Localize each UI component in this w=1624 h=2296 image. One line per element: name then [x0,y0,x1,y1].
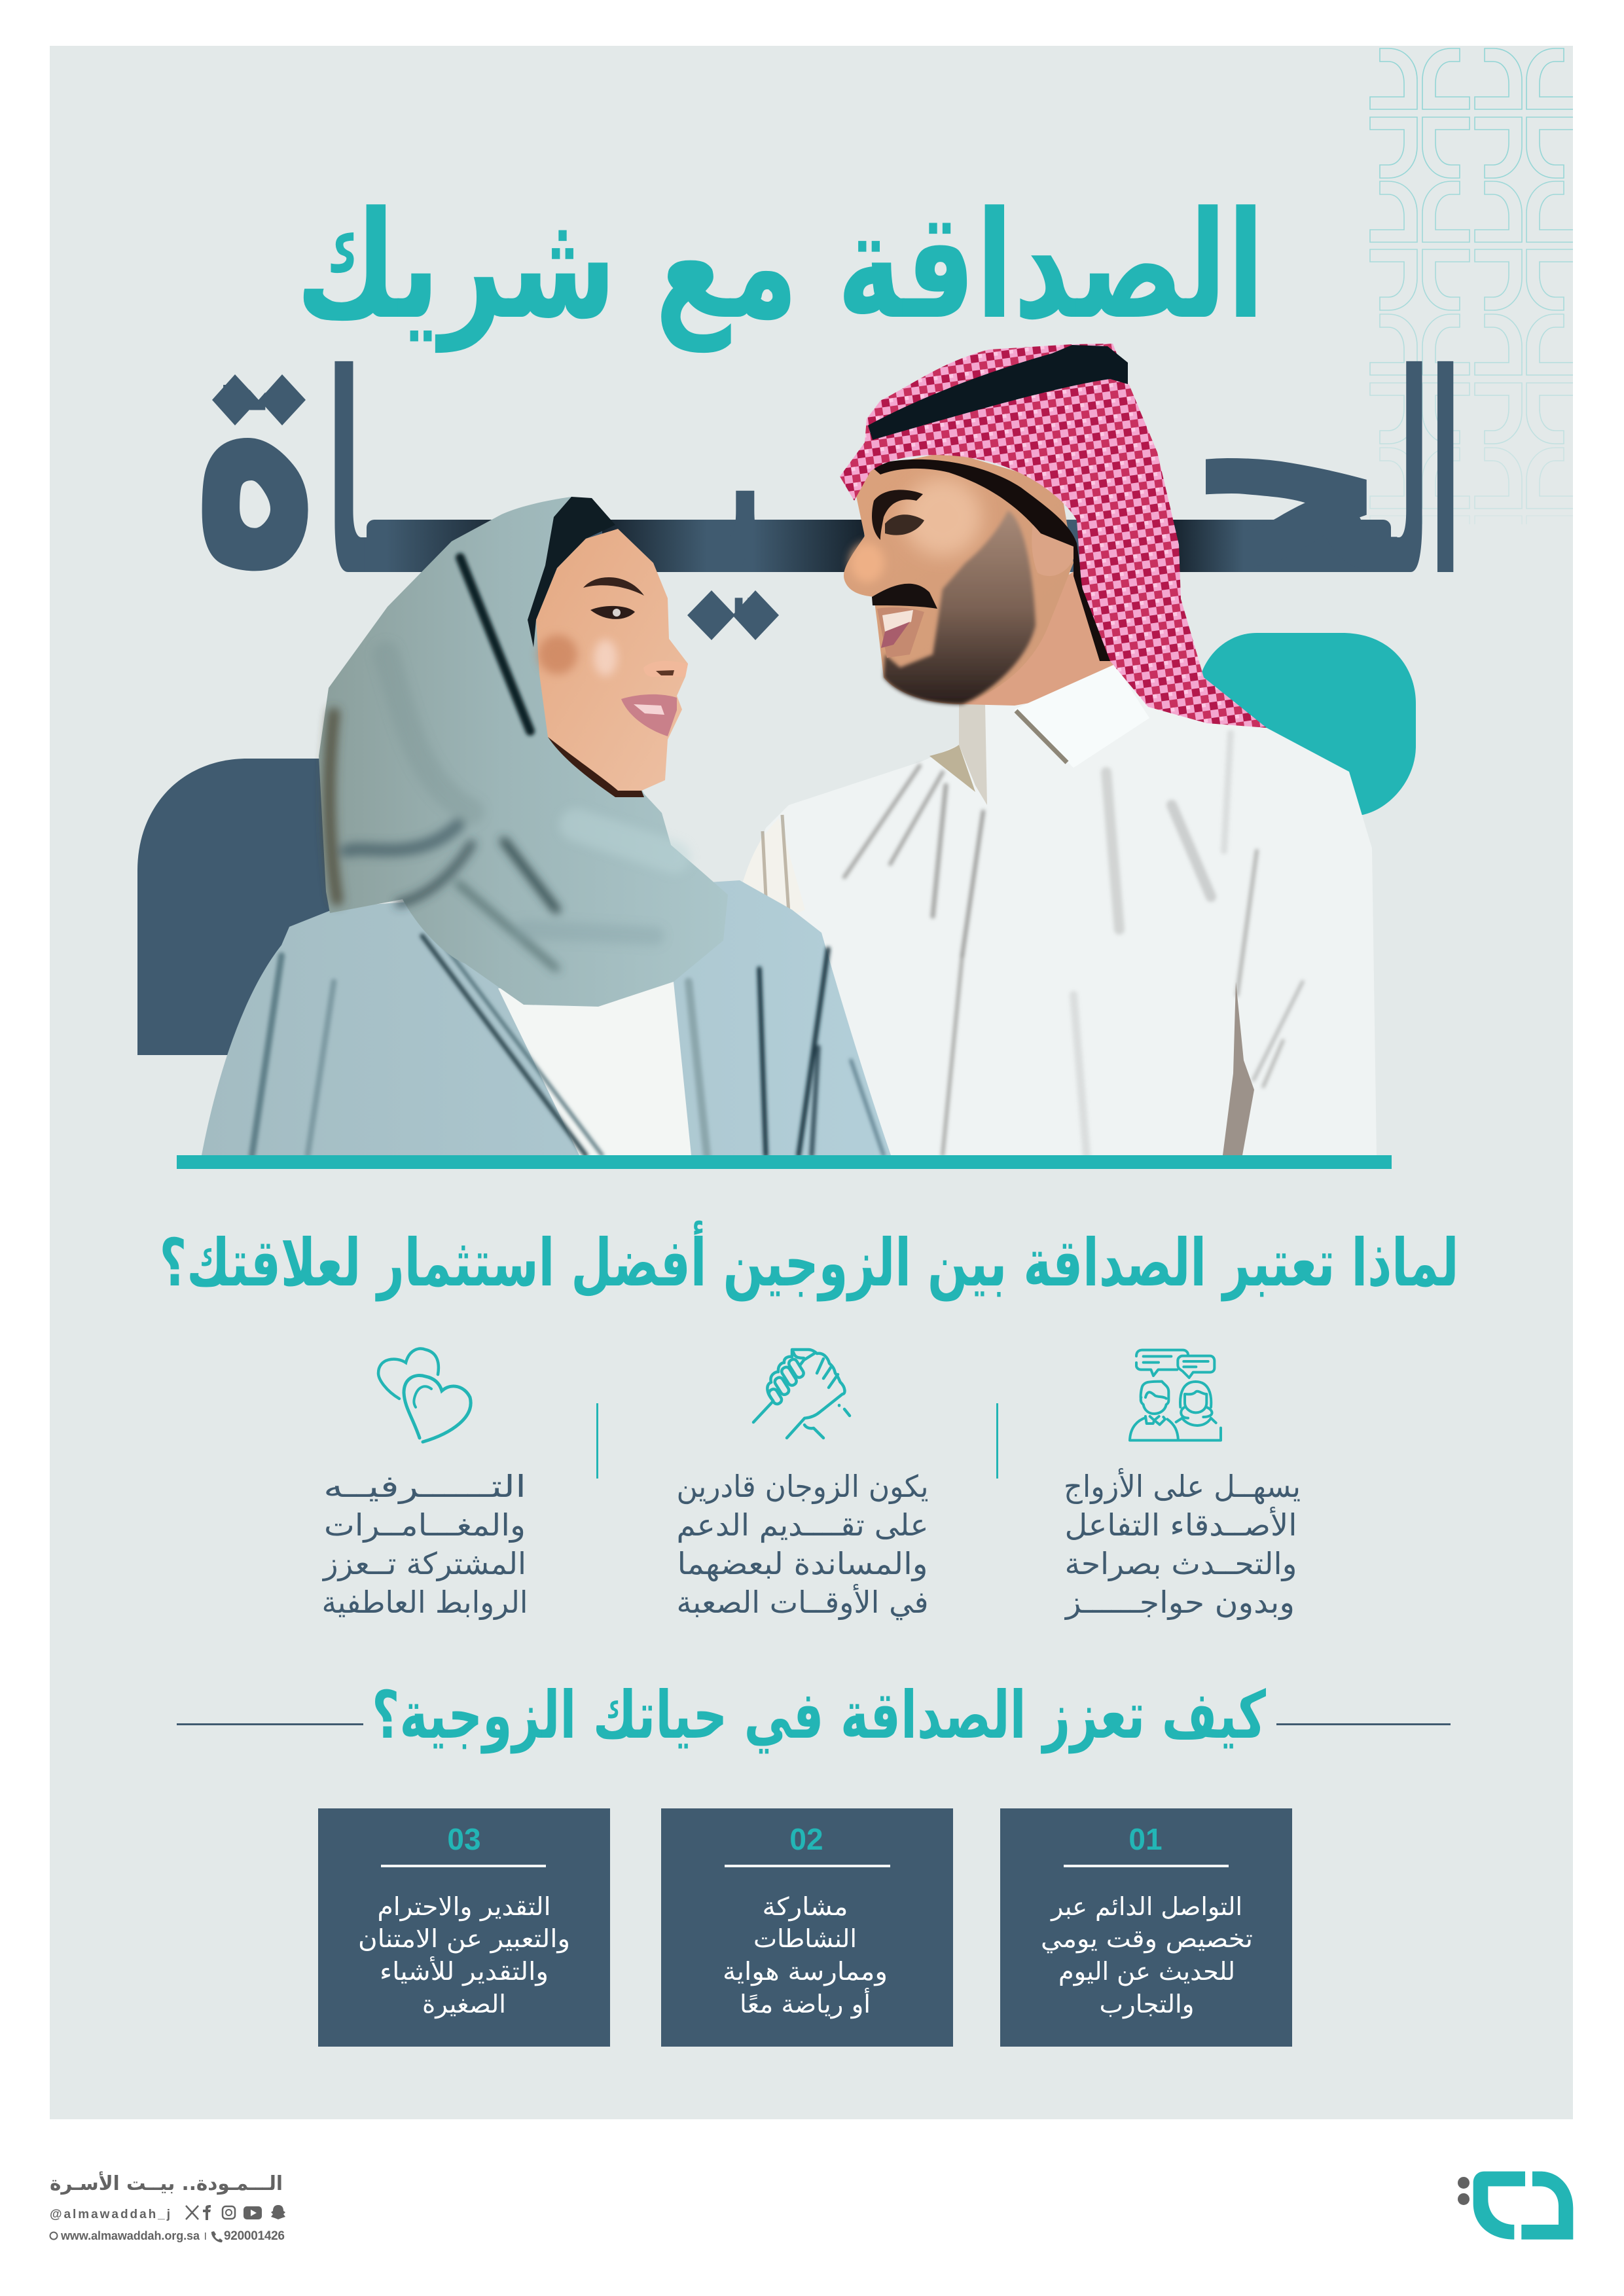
card 03 [318,1808,610,2047]
text: ال‍ [1394,314,1461,637]
text column: left: المشتركة تــعزز [322,1546,526,1582]
woman nose [643,661,688,677]
card 03: 03 [447,1822,481,1856]
man beard [884,511,1036,704]
card 03: التقدير والاحترام [377,1892,551,1922]
man nose highlight [850,543,884,583]
woman hijab [319,497,728,1007]
divider right [996,1403,998,1479]
card 02: وممارسة هواية [723,1957,888,1986]
man hair [871,459,1113,661]
woman abaya folds [252,936,884,1155]
card 02: أو رياضة معًا [740,1988,871,2019]
man mustache and mouth [872,584,937,609]
title line 2: ‍ح‍ [1174,312,1398,639]
man eye and brow [872,490,923,540]
man placket [959,704,987,805]
text column: left: التــــــرفيــه [323,1469,526,1505]
text column: left: الروابط العاطفية [322,1585,528,1621]
heading: how friendship strengthens: كيف تعزز الصداقة في حياتك الزوجية؟ [372,1677,1267,1754]
text column: middle: على تقــــديم الدعم [677,1507,928,1543]
man cheek highlight [903,478,982,556]
footer: contact block [50,2171,285,2243]
footer social icons [186,2205,285,2220]
woman hijab shadows [329,655,674,969]
man agal [868,345,1128,440]
woman white top [498,982,691,1155]
man ear [1032,524,1076,576]
icon: hearts [378,1349,471,1442]
woman face [536,529,688,791]
text column: right: وبدون حواجــــــز [1064,1585,1295,1621]
footer website [50,2232,58,2240]
text column: left [322,1469,528,1621]
man neck [962,563,1119,706]
text column: middle [677,1469,928,1621]
icon: couple talking [1130,1350,1221,1441]
woman cheek [538,635,577,674]
woman cheek highlight [594,639,617,676]
text column: right: الأصــدقاء التفاعل [1064,1506,1297,1543]
logo [1458,2172,1573,2240]
footer handle: @almawaddah_j [50,2208,170,2221]
title line 2: ة [192,243,319,643]
card 01: تخصيص وقت يومي [1041,1924,1253,1954]
card 03: والتعبير عن الامتنان [358,1924,570,1954]
woman abaya [202,880,891,1155]
man shirt [743,664,1377,1155]
man ghutra [840,344,1267,728]
photo: man [743,344,1377,1155]
card 01: 01 [1128,1822,1163,1856]
woman jaw shadow [548,737,644,797]
footer: contact block: www.almawaddah.org.sa [60,2229,200,2242]
icon: handshake [753,1350,850,1438]
photo: woman [202,497,891,1155]
shape: teal blob behind man [1198,633,1416,815]
text column: middle: والمساندة لبعضهما [677,1546,928,1582]
card 01: والتجارب [1100,1990,1194,2019]
shape: navy block behind woman [137,759,340,1055]
man arm gap [1223,982,1254,1155]
card 02: النشاطات [753,1924,857,1953]
card 03: الصغيرة [422,1990,506,2019]
footer: contact block: 920001426 [224,2229,285,2243]
man face [844,452,1074,704]
woman lips [621,694,677,736]
card 02 [661,1808,953,2047]
card 01 [1000,1808,1292,2047]
card 02: مشاركة [762,1892,848,1921]
text column: right [1064,1467,1301,1621]
text column: left: والمغـــامــرات [324,1507,526,1543]
card 01: للحديث عن اليوم [1058,1957,1235,1986]
woman hijab dark stripe [460,558,530,731]
divider left [596,1403,598,1479]
text column: right: يسهــل على الأزواج [1064,1467,1301,1505]
card 03: والتقدير للأشياء [380,1956,549,1986]
decorative pattern top right [1370,48,1574,577]
footer slogan: الـــمـودة.. بيــت الأسـرة [50,2171,283,2195]
text column: middle: يكون الزوجان قادرين [677,1469,928,1505]
text shadows beside figures [386,520,1244,572]
woman brow and eye [583,577,644,596]
card 02: 02 [789,1822,823,1856]
woman under-scarf [528,497,615,647]
man collar [1014,664,1149,768]
man sleeve pleats [743,815,805,916]
title line 1: الصداقة مع شريك [296,180,1265,353]
footer phone [211,2231,223,2242]
card 01: التواصل الدائم عبر [1050,1892,1242,1922]
text column: right: والتحــدث بصراحة [1064,1546,1297,1582]
text column: middle: في الأوقــات الصعبة [677,1583,928,1621]
teal bar under photo [177,1155,1392,1169]
title line 2 [192,243,1461,643]
